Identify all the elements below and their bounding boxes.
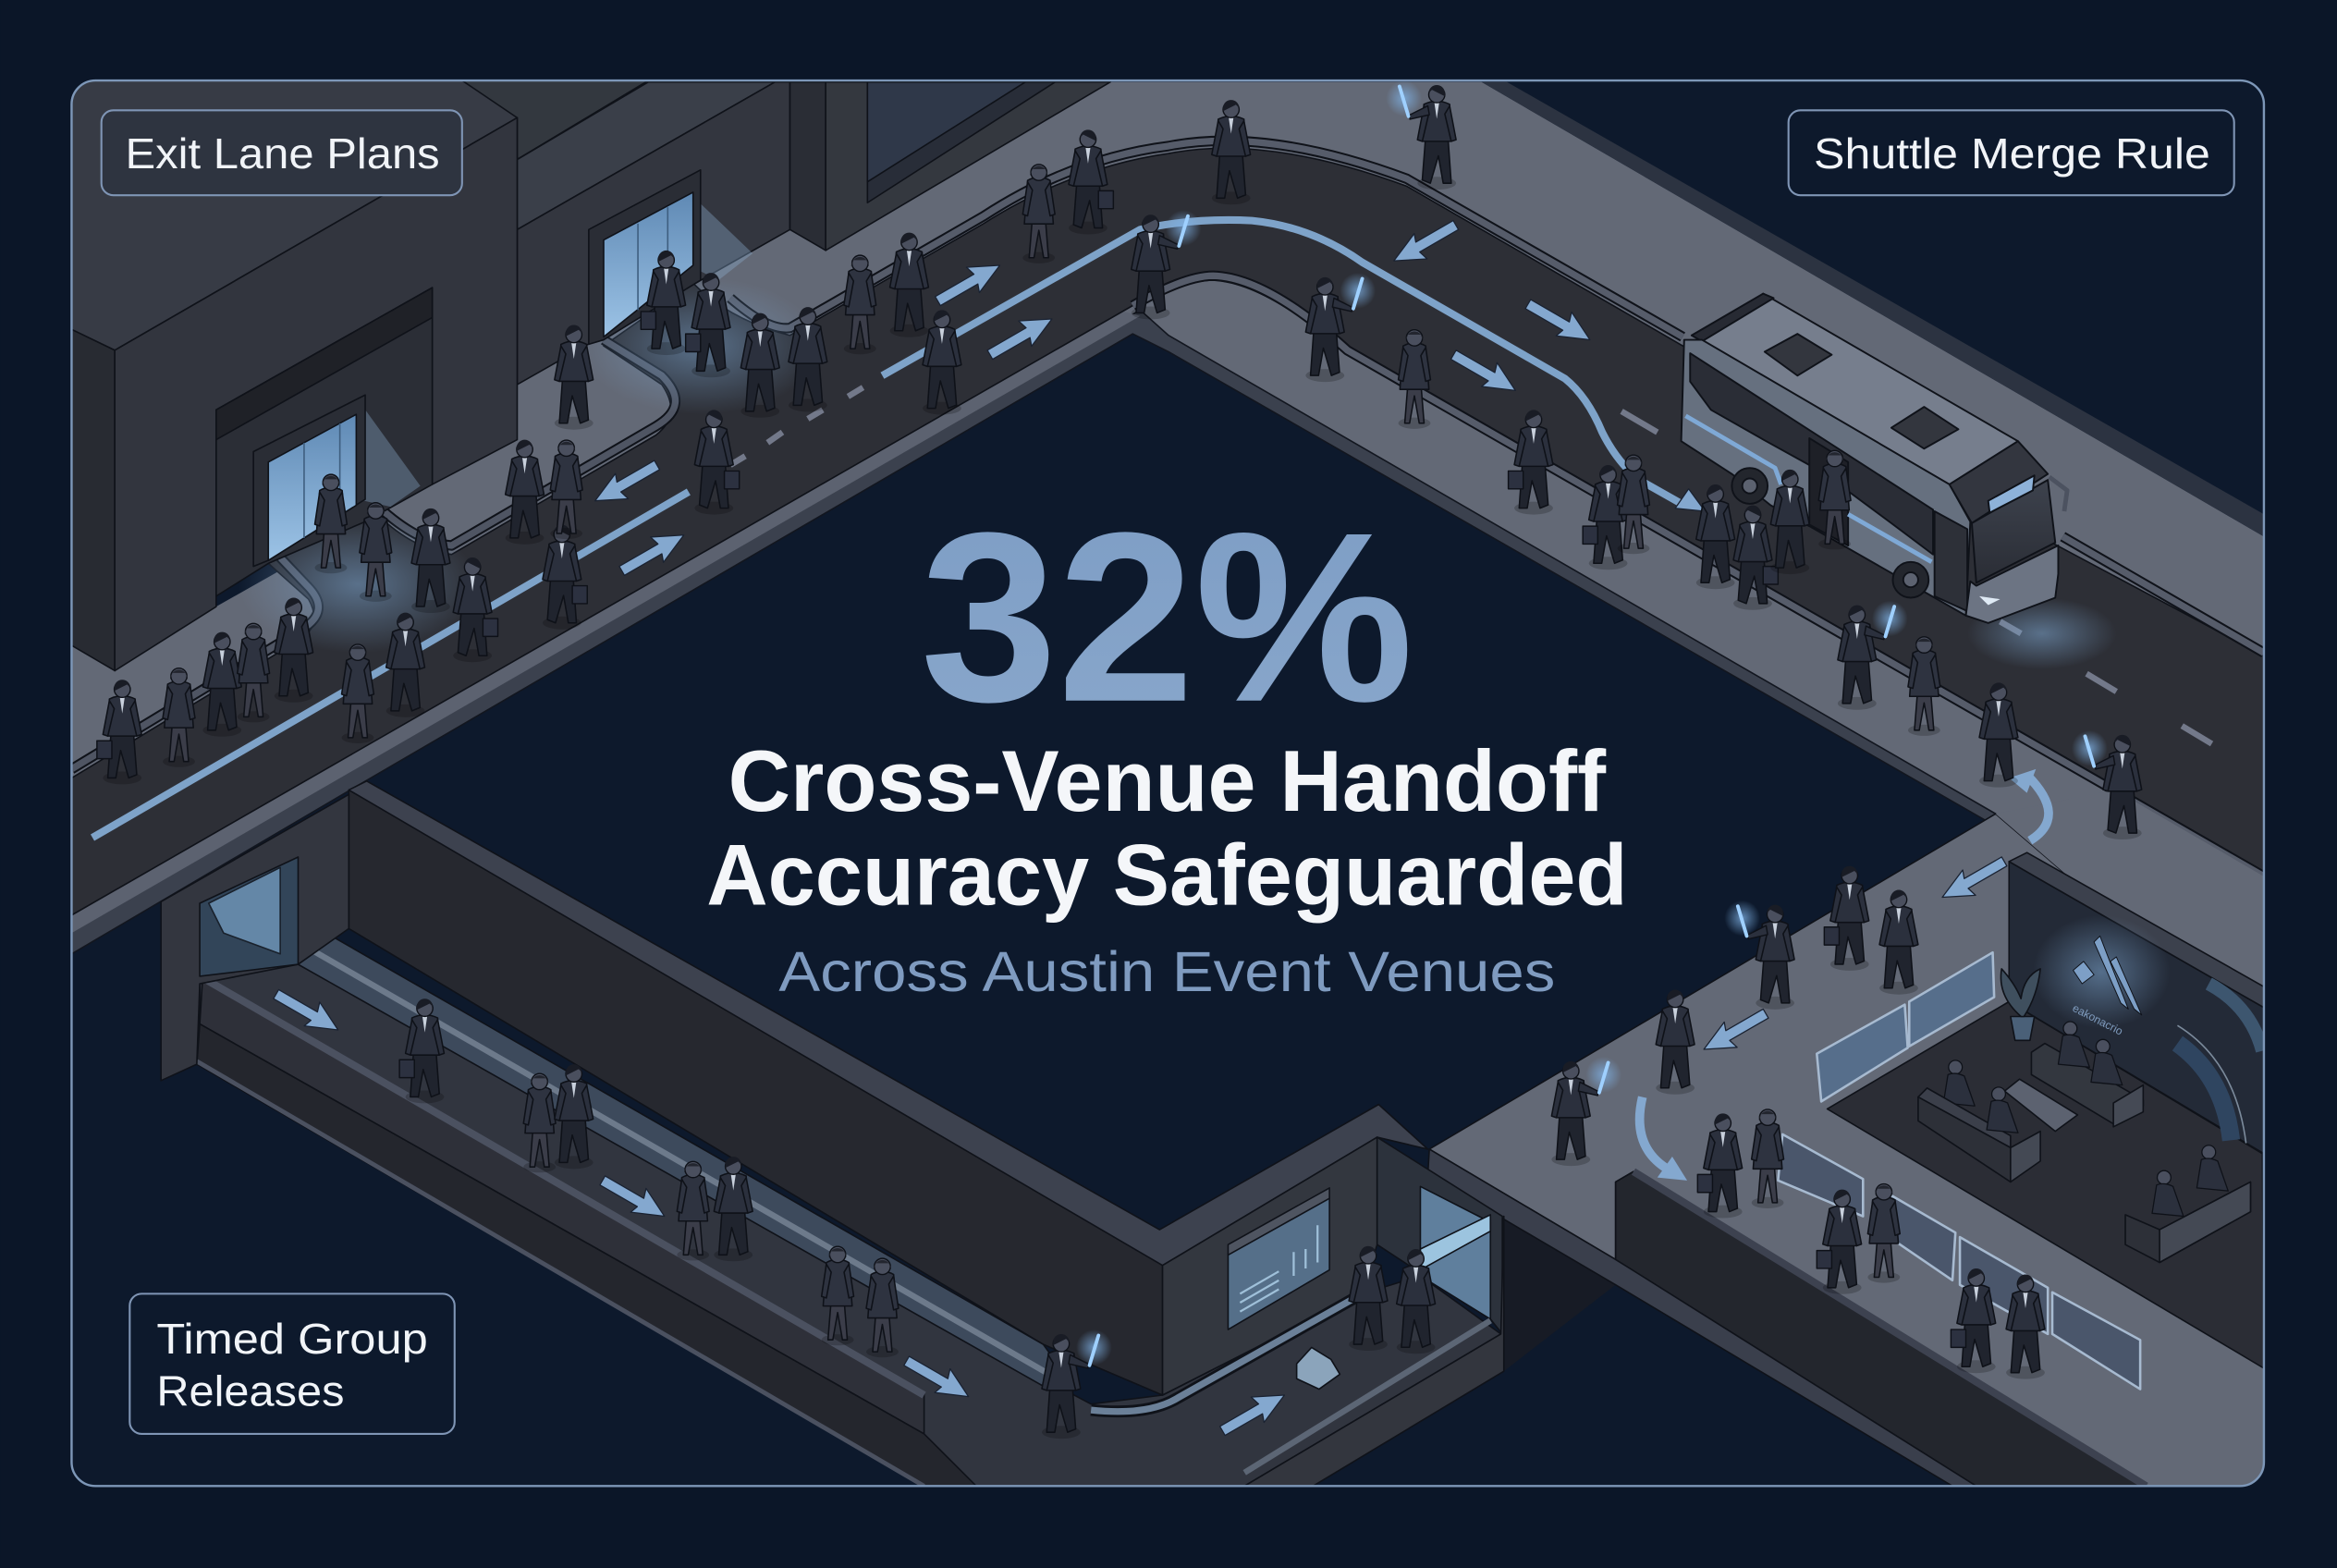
big stat: 32% xyxy=(921,484,1413,753)
lower right platform xyxy=(1428,790,2264,1486)
curb edges xyxy=(71,141,2264,876)
asphalt road with curved bend xyxy=(71,148,2264,915)
direction arrows on upper road xyxy=(588,214,1705,582)
people: left venue queue xyxy=(97,129,1201,784)
corridor arrows xyxy=(269,981,1291,1442)
bus doorway xyxy=(1809,438,1848,545)
shuttle bus xyxy=(1682,294,2116,669)
lane stripes and dashes xyxy=(92,220,2212,838)
potted plant xyxy=(2001,969,2040,1040)
glowing door: upper venue exit xyxy=(589,170,752,344)
bus front door panel xyxy=(1935,511,1967,611)
label: shuttle merge rule xyxy=(1789,110,2234,195)
people: shuttle boarding line xyxy=(1212,80,2142,839)
bus roof xyxy=(1702,294,2018,484)
main building with recessed doorway xyxy=(71,80,517,670)
destination sign xyxy=(1988,475,2035,513)
title line two: Accuracy Safeguarded xyxy=(706,827,1628,924)
label: timed group releases: Timed Group xyxy=(156,1315,428,1363)
bus side windows xyxy=(1690,353,1933,555)
label: exit lane plans xyxy=(102,110,462,195)
headline block xyxy=(706,484,1628,1003)
background building wing xyxy=(447,80,1110,385)
subtitle: Across Austin Event Venues xyxy=(778,940,1555,1003)
lower left doorway xyxy=(161,794,349,1081)
label: exit lane plans: Exit Lane Plans xyxy=(125,129,440,178)
lower platform arrows xyxy=(1640,769,2049,1181)
sunken lounge xyxy=(1828,852,2264,1368)
label: shuttle merge rule: Shuttle Merge Rule xyxy=(1814,129,2210,178)
lounge wall logo xyxy=(2074,936,2142,1015)
wall void beside briefing room xyxy=(1505,1220,1614,1370)
title line one: Cross-Venue Handoff xyxy=(728,732,1607,829)
people: corridor walkers xyxy=(399,998,1436,1439)
armchairs with guests xyxy=(2031,1022,2143,1127)
people: platform walkers xyxy=(1551,866,2045,1379)
logo wordmark: eakonacrio xyxy=(2071,1001,2125,1038)
label: timed group releases: Releases xyxy=(156,1366,344,1415)
upper walkway and sidewalk surfaces xyxy=(71,82,2264,986)
glass barrier panels xyxy=(1778,952,2140,1390)
coffee table xyxy=(2004,1079,2077,1132)
side sofa xyxy=(2125,1145,2250,1263)
briefing room xyxy=(1091,1137,1504,1486)
lower corridor floor and railings xyxy=(197,921,1501,1486)
bus side body xyxy=(1682,340,1970,616)
lower corridor back wall xyxy=(349,781,1428,1395)
sofa with guests xyxy=(1918,1060,2040,1182)
wall info screen xyxy=(1228,1188,1329,1329)
bus windshield xyxy=(1950,441,2048,523)
wall graphic arcs xyxy=(2177,984,2262,1144)
label: timed group releases xyxy=(129,1293,455,1434)
door light on pavement xyxy=(239,277,820,653)
dropped equipment xyxy=(1297,1347,1340,1390)
